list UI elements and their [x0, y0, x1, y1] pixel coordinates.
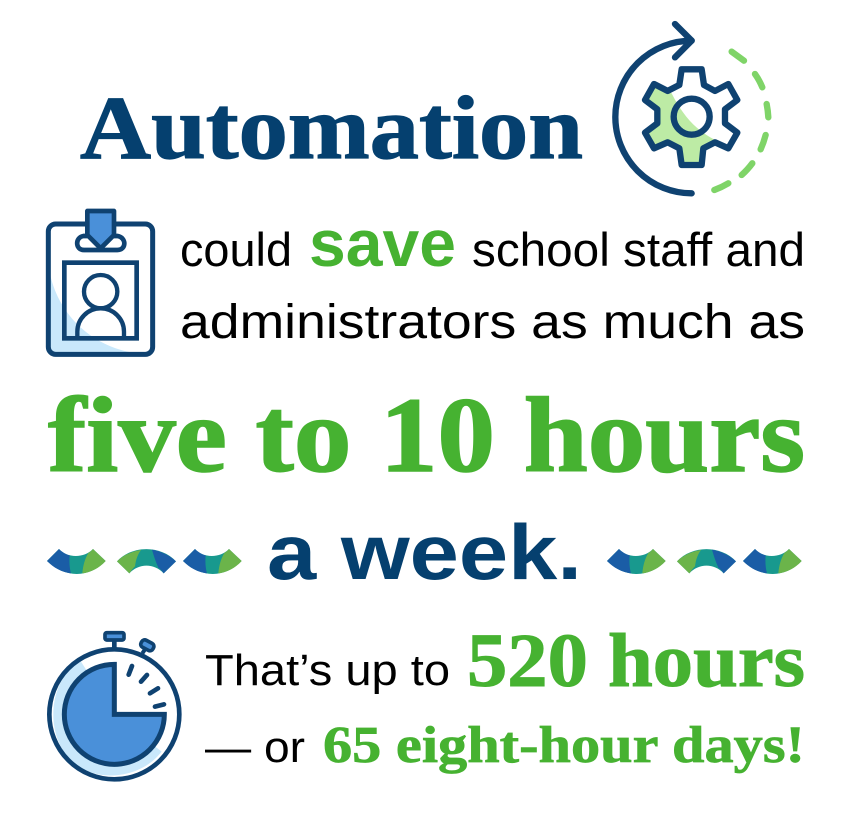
text: administrators as much as: administrators as much as — [180, 296, 805, 349]
headline: five to 10 hours: five to 10 hours — [48, 377, 805, 495]
decoration: left wave band — [47, 549, 242, 574]
icon: gear with circular arrow — [615, 24, 768, 193]
text: or 65 eight-hour days!: — or — [205, 723, 305, 772]
text: That's up to 520 hours: That’s up to — [205, 646, 450, 695]
decoration: right wave band — [607, 549, 802, 574]
text: That's up to 520 hours — [205, 619, 805, 703]
text: could save school staff and: school staff and — [472, 223, 805, 276]
text: That's up to 520 hours: 520 hours — [467, 619, 805, 703]
text: could save school staff and: save — [309, 206, 456, 280]
text: or 65 eight-hour days!: 65 eight-hour days! — [323, 717, 805, 774]
icon: ID badge — [48, 211, 153, 354]
text: a week.: a week. — [267, 508, 582, 596]
text: could save school staff and — [180, 206, 805, 280]
title: Automation: Automation — [80, 79, 583, 178]
icon: stopwatch — [49, 633, 179, 779]
text: could save school staff and: could — [180, 223, 292, 276]
